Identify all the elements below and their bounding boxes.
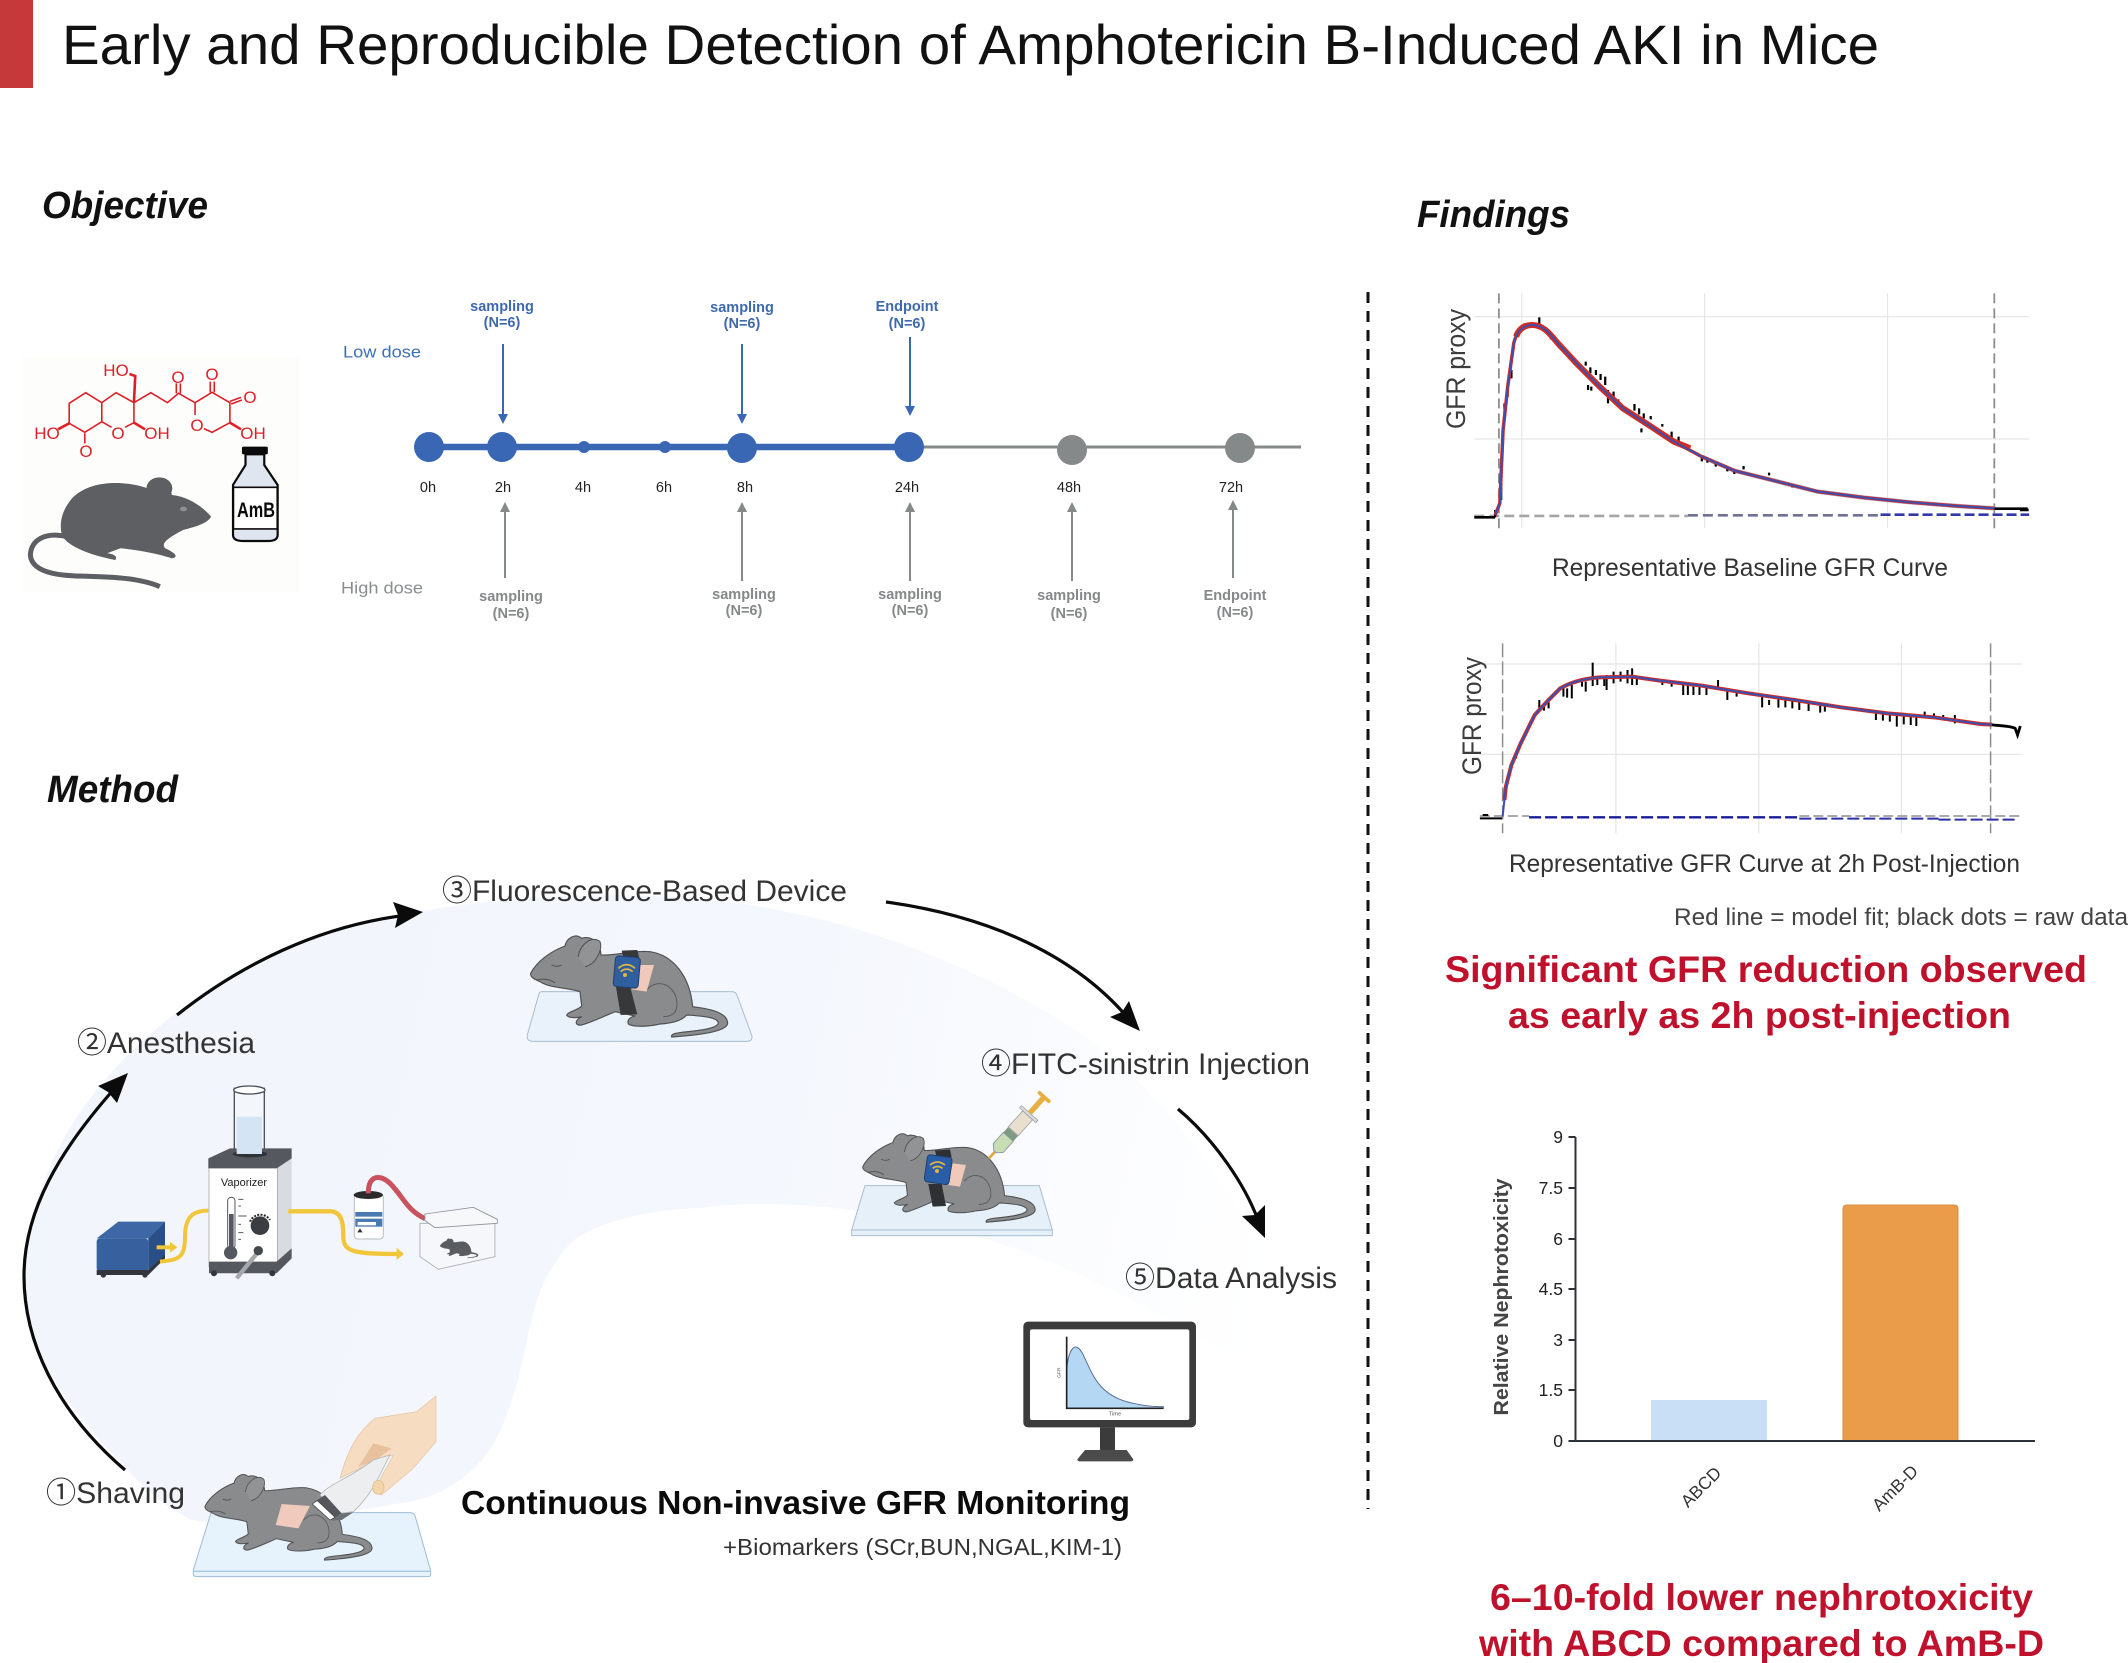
workflow background blob bbox=[24, 895, 1337, 1523]
key finding: GFR reduction: Significant GFR reduction observed bbox=[1445, 948, 2087, 990]
time labels: 4h bbox=[575, 480, 591, 496]
caption: baseline curve: Representative Baseline GFR Curve bbox=[1552, 554, 1948, 582]
axes and ticks bbox=[1568, 1137, 2035, 1441]
panel: objective bbox=[22, 185, 1301, 622]
icon: monitor with GFR curve: GFR bbox=[1056, 1367, 1062, 1378]
y-axis tick labels: 3 bbox=[1553, 1330, 1563, 1350]
high-dose sampling arrows and labels: sampling bbox=[878, 587, 942, 603]
icon: chemical structure of amphotericin B: O bbox=[111, 424, 125, 443]
panel: method bbox=[24, 769, 1337, 1577]
caption: 2h curve: Representative GFR Curve at 2h Post-Injection bbox=[1509, 850, 2020, 878]
high-dose sampling arrows and labels: (N=6) bbox=[726, 603, 762, 619]
low-dose sampling arrows and labels bbox=[470, 299, 939, 424]
icon: AmB bottle bbox=[233, 447, 278, 541]
chart: baseline GFR curve bbox=[1441, 293, 2029, 582]
low-dose sampling arrows and labels: sampling bbox=[470, 299, 534, 315]
icon: anesthesia setup with vaporizer bbox=[97, 1086, 497, 1278]
icon: chemical structure of amphotericin B: O bbox=[171, 368, 185, 387]
icon: chemical structure of amphotericin B: HO bbox=[103, 361, 129, 380]
canister bbox=[354, 1191, 383, 1239]
icon: chemical structure of amphotericin B: OH bbox=[240, 424, 266, 443]
dose timeline bbox=[341, 299, 1301, 622]
icon: chemical structure of amphotericin B: O bbox=[190, 416, 204, 435]
time labels: 48h bbox=[1057, 480, 1081, 496]
y-axis tick labels: 6 bbox=[1553, 1229, 1563, 1249]
icon: mouse silhouette bbox=[30, 477, 211, 587]
caption: biomarkers: +Biomarkers (SCr,BUN,NGAL,KIM-1) bbox=[723, 1534, 1122, 1560]
low-dose sampling arrows and labels: Endpoint bbox=[876, 299, 939, 315]
bar chart: relative nephrotoxicity bbox=[1491, 1127, 2035, 1515]
vaporizer: Vaporizer bbox=[221, 1177, 267, 1189]
divider bbox=[1366, 292, 1370, 1509]
label: low dose: Low dose bbox=[343, 342, 421, 362]
step labels: ④FITC-sinistrin Injection bbox=[981, 1048, 1310, 1081]
step labels: ①Shaving bbox=[46, 1477, 185, 1510]
caption: continuous monitoring: Continuous Non-invasive GFR Monitoring bbox=[461, 1484, 1130, 1521]
y-axis tick labels: 9 bbox=[1553, 1127, 1563, 1147]
x-axis category labels: ABCD bbox=[1677, 1463, 1725, 1511]
icon: chemical structure of amphotericin B: OH bbox=[144, 424, 170, 443]
vaporizer bbox=[208, 1086, 292, 1278]
low-dose sampling arrows and labels: (N=6) bbox=[889, 316, 925, 332]
icon: monitor with GFR curve: Time bbox=[1109, 1412, 1121, 1418]
anesthesia chamber bbox=[420, 1207, 497, 1269]
low-dose sampling arrows and labels: sampling bbox=[710, 300, 774, 316]
key finding: GFR reduction bbox=[1445, 948, 2087, 1036]
axis label: GFR proxy: GFR proxy bbox=[1457, 657, 1487, 775]
illustration: molecule, mouse and AmB bottle bbox=[22, 357, 299, 592]
y-axis tick labels: 4.5 bbox=[1539, 1279, 1563, 1299]
bar: AmB-D bbox=[1843, 1205, 1958, 1441]
high-dose sampling arrows and labels: (N=6) bbox=[1217, 605, 1253, 621]
time labels: 72h bbox=[1219, 480, 1243, 496]
title: Early and Reproducible Detection of Amphotericin B-Induced AKI in Mice bbox=[62, 13, 1879, 76]
high-dose sampling arrows and labels bbox=[479, 500, 1267, 622]
icon: monitor with GFR curve bbox=[1023, 1322, 1196, 1461]
high-dose sampling arrows and labels: sampling bbox=[1037, 588, 1101, 604]
y-axis tick labels bbox=[1539, 1127, 1563, 1451]
y-axis tick labels: 1.5 bbox=[1539, 1380, 1563, 1400]
icon: chemical structure of amphotericin B: HO bbox=[34, 424, 60, 443]
key finding: lower nephrotoxicity bbox=[1478, 1576, 2044, 1663]
bar: ABCD bbox=[1651, 1400, 1767, 1441]
axis label: GFR proxy: GFR proxy bbox=[1441, 309, 1471, 429]
heading: objective: Objective bbox=[42, 185, 208, 227]
y-axis tick labels: 7.5 bbox=[1539, 1178, 1563, 1198]
workflow arrows bbox=[24, 902, 1265, 1470]
step labels bbox=[46, 875, 1337, 1510]
high-dose sampling arrows and labels: sampling bbox=[712, 587, 776, 603]
icon: mouse with FITC-sinistrin syringe bbox=[852, 1088, 1054, 1236]
time labels: 0h bbox=[420, 480, 436, 496]
chart: GFR curve at 2h post-injection bbox=[1457, 643, 2021, 878]
high-dose sampling arrows and labels: (N=6) bbox=[892, 603, 928, 619]
x-axis category labels bbox=[1677, 1461, 1922, 1515]
x-axis category labels: AmB-D bbox=[1868, 1461, 1922, 1515]
time labels bbox=[420, 480, 1243, 496]
high-dose sampling arrows and labels: Endpoint bbox=[1204, 588, 1267, 604]
key finding: lower nephrotoxicity: 6–10-fold lower nephrotoxicity bbox=[1490, 1576, 2033, 1618]
time labels: 6h bbox=[656, 480, 672, 496]
icon: chemical structure of amphotericin B: O bbox=[243, 388, 257, 407]
icon: mouse with fluorescence device bbox=[527, 936, 752, 1041]
high-dose sampling arrows and labels: sampling bbox=[479, 589, 543, 605]
icon: chemical structure of amphotericin B: O bbox=[79, 442, 93, 461]
legend note: Red line = model fit; black dots = raw data bbox=[1674, 904, 2128, 931]
high-dose sampling arrows and labels: (N=6) bbox=[493, 606, 529, 622]
pump bbox=[97, 1222, 165, 1278]
key finding: lower nephrotoxicity: with ABCD compared to AmB-D bbox=[1478, 1622, 2044, 1663]
icon: AmB bottle: AmB bbox=[237, 499, 275, 522]
timeline axis bbox=[414, 432, 1301, 465]
icon: chemical structure of amphotericin B bbox=[34, 361, 266, 461]
time labels: 2h bbox=[495, 480, 511, 496]
key finding: GFR reduction: as early as 2h post-injection bbox=[1508, 994, 2011, 1036]
icon: shaving mouse with razor and hand bbox=[193, 1396, 436, 1577]
heading: findings: Findings bbox=[1417, 194, 1570, 236]
step labels: ②Anesthesia bbox=[77, 1027, 255, 1060]
icon: chemical structure of amphotericin B: O bbox=[205, 365, 219, 384]
step labels: ⑤Data Analysis bbox=[1125, 1262, 1337, 1295]
low-dose sampling arrows and labels: (N=6) bbox=[724, 316, 760, 332]
time labels: 8h bbox=[737, 480, 753, 496]
y-axis title: Relative Nephrotoxicity bbox=[1491, 1178, 1513, 1416]
time labels: 24h bbox=[895, 480, 919, 496]
header bar accent bbox=[0, 0, 33, 88]
label: high dose: High dose bbox=[341, 578, 423, 598]
heading: method: Method bbox=[47, 769, 179, 811]
low-dose sampling arrows and labels: (N=6) bbox=[484, 315, 520, 331]
high-dose sampling arrows and labels: (N=6) bbox=[1051, 606, 1087, 622]
y-axis tick labels: 0 bbox=[1553, 1431, 1563, 1451]
panel: findings bbox=[1417, 194, 2128, 1663]
step labels: ③Fluorescence-Based Device bbox=[442, 875, 847, 908]
